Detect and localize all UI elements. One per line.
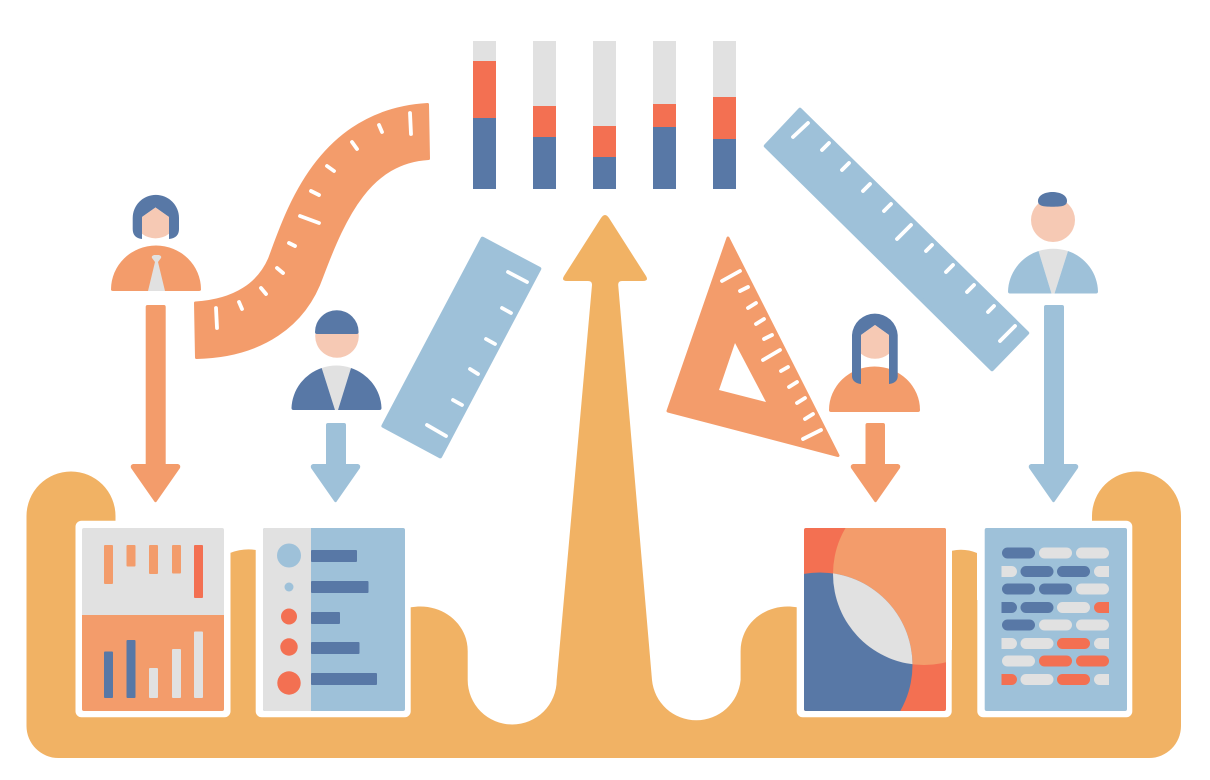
- base platform with central arrow: [26, 215, 1181, 758]
- panel 3: overlapping circles: [796, 528, 952, 718]
- arrow: person 2 to panel 2: [311, 423, 360, 502]
- arrow: person 4 to panel 4: [1029, 305, 1078, 502]
- blue ruler right: [766, 110, 1027, 369]
- orange set square: [668, 238, 838, 456]
- person 2: man in dark suit: [292, 310, 382, 410]
- panel 4: pill matrix: [977, 521, 1132, 717]
- arrow: person 3 to panel 3: [851, 423, 900, 502]
- panel 1: diverging bars: [76, 521, 230, 717]
- person 1: woman with tie: [111, 195, 201, 291]
- curved orange ruler: [196, 104, 428, 358]
- person 4: man in light suit: [1008, 192, 1098, 294]
- panel 2: bubble and bar list: [256, 521, 411, 717]
- stacked bar chart: [473, 41, 736, 189]
- arrow: person 1 to panel 1: [131, 305, 180, 502]
- person 3: woman with long hair: [829, 314, 920, 412]
- blue ruler left: [383, 239, 539, 456]
